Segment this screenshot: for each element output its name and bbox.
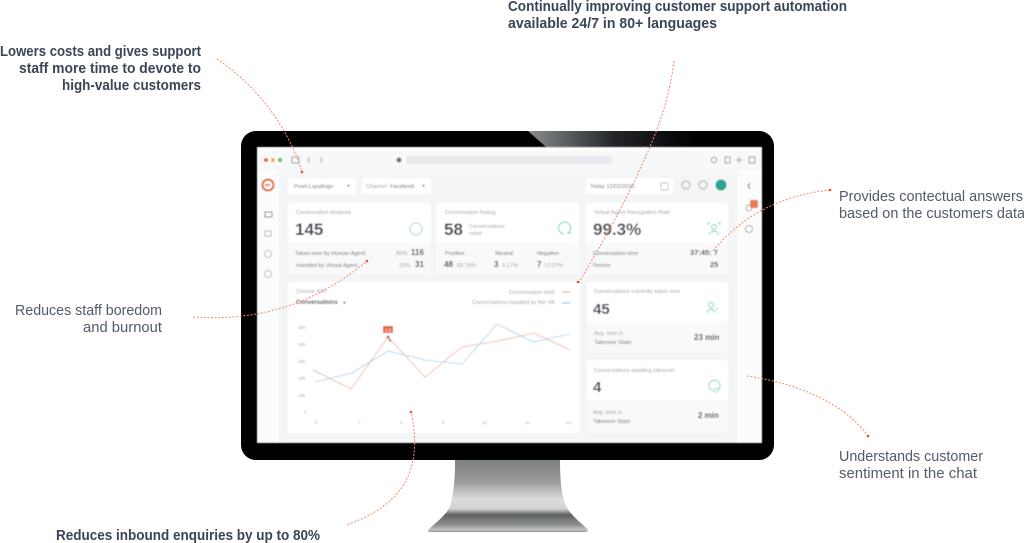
date picker: [586, 178, 673, 194]
chart axes: 40k: [298, 342, 306, 347]
card: line chart: [288, 282, 580, 433]
filter: Pearl-Lapalingo: Pearl-Lapalingo: [294, 184, 333, 190]
dashboard screen: [257, 147, 762, 443]
callout: staff boredom: [15, 303, 162, 336]
card: virtual agent recognition rate: Conversation time: [593, 251, 638, 257]
callout: contextual answers: [839, 189, 1024, 222]
chart axes: [298, 325, 572, 425]
card: conversation rating: Conversations: [469, 224, 505, 230]
card: conversation rating: Neutral: [495, 251, 513, 257]
right sidebar: [737, 170, 762, 443]
card: conversations awaiting takeover: Avg. time in: [593, 410, 622, 416]
card: conversation analysis: 31: [415, 260, 424, 269]
filter: channel: Facebook: [390, 184, 415, 190]
callout: lowers costs: high-value customers: [62, 78, 201, 94]
card: conversation rating: Negative: [537, 251, 559, 257]
card: virtual agent recognition rate: Retries: [593, 263, 611, 269]
callout: contextual answers: Provides contectual answers: [839, 189, 1023, 205]
callout: staff boredom: Reduces staff boredom: [15, 303, 162, 319]
card: conversation analysis: Conversation Analysis: [296, 210, 351, 216]
card: conversations currently taken over: 45: [593, 301, 610, 318]
card: virtual agent recognition rate: 37:45: 7: [690, 248, 718, 257]
callout: sentiment: [839, 449, 983, 482]
card: conversations awaiting takeover: 2 min: [698, 411, 719, 420]
chart axes: 8: [400, 420, 403, 425]
filter: channel: [362, 178, 431, 194]
callout: contextual answers: based on the customers data: [839, 206, 1024, 222]
card: conversations currently taken over: Takeover State: [594, 340, 631, 346]
chart axes: 0: [304, 410, 307, 415]
chart axes: 11: [525, 420, 530, 425]
callout: lowers costs: Lowers costs and gives support: [0, 44, 201, 60]
chart axes: 12: [566, 420, 572, 425]
card: conversation rating: 48: [444, 260, 453, 269]
callout: lowers costs: staff more time to devote to: [19, 61, 201, 77]
chart legend: Conversation held: [509, 290, 554, 296]
callout connector: inbound enquiries: [346, 411, 415, 525]
callout: sentiment: sentiment in the chat: [839, 466, 977, 482]
data point tooltip: 1.5: [385, 328, 392, 332]
card: conversations awaiting takeover: [587, 360, 728, 433]
card: conversation rating: Conversation Rating: [445, 210, 496, 216]
card: conversation analysis: 116: [411, 248, 424, 257]
card: conversation rating: rated: [469, 231, 482, 237]
chart axes: 30k: [298, 359, 306, 364]
chart axes: 10: [482, 420, 488, 425]
filter: channel: Channel: [366, 184, 387, 190]
callout: sentiment: Understands customer: [839, 449, 983, 465]
callout connector: sentiment: [747, 376, 869, 437]
card: conversation analysis: [288, 203, 431, 275]
card: conversation rating: Positive: [445, 251, 465, 257]
card: conversation rating: 7: [537, 260, 542, 269]
callout connector: lowers costs: [217, 59, 303, 173]
card: conversations currently taken over: Avg. time in: [594, 331, 623, 337]
chart axes: 9: [442, 420, 445, 425]
chart axes: 10k: [298, 393, 306, 398]
card: conversation analysis: 145: [295, 220, 323, 239]
callout: automation: available 24/7 in 80+ languages: [508, 16, 717, 32]
card: conversation analysis: Handled by Virtual Agent: [296, 263, 358, 269]
card: conversation rating: 82.76%: [457, 263, 476, 269]
card: conversation rating: 58: [444, 220, 463, 239]
callout: automation: [508, 0, 847, 32]
chart legend: Conversations handled by the VA: [472, 300, 555, 306]
data point tooltip: [383, 326, 393, 342]
callout: staff boredom: and burnout: [83, 320, 162, 336]
card: conversations awaiting takeover: 4: [593, 379, 602, 396]
chart axes: 20k: [298, 376, 306, 381]
card: conversation analysis: Taken over by Human Agent: [295, 251, 366, 257]
browser toolbar: [257, 147, 762, 170]
card: conversation analysis: 80%: [396, 251, 407, 257]
toolbar icons: [682, 180, 726, 190]
card: conversations awaiting takeover: Takeover State: [593, 419, 630, 425]
card: conversation rating: [436, 203, 579, 275]
card: line chart: Conversations: [296, 300, 338, 306]
left sidebar: [257, 170, 279, 443]
line: conversation held: [313, 333, 570, 389]
card: virtual agent recognition rate: [586, 203, 728, 275]
callout connector: contextual answers: [712, 189, 831, 252]
monitor bezel: [241, 131, 774, 460]
card: conversation rating: 3: [494, 260, 499, 269]
card: conversations currently taken over: [587, 282, 728, 353]
card: conversations awaiting takeover: Conversations awaiting takeover: [594, 368, 675, 374]
chart axes: 7: [358, 420, 361, 425]
date picker: Today 12/02/2020: [590, 184, 634, 190]
line: conversations handled: [315, 324, 570, 382]
callout connector: automation: [577, 61, 674, 284]
card: line chart: Choose KPI: [296, 289, 326, 295]
card: conversation analysis: 20%: [399, 263, 410, 269]
chart axes: 50k: [298, 325, 306, 330]
callout connector: staff boredom: [193, 260, 368, 318]
card: conversations currently taken over: Conversations currently taken over: [594, 289, 681, 295]
monitor stand: [428, 460, 588, 532]
card: conversation rating: 12.07%: [544, 263, 563, 269]
chart axes: 6: [315, 420, 318, 425]
card: conversations currently taken over: 23 min: [694, 333, 719, 342]
card: virtual agent recognition rate: 25: [710, 260, 718, 269]
card: virtual agent recognition rate: Virtual Agent Recognition Rate: [594, 210, 670, 216]
card: conversation rating: 5.17%: [502, 263, 518, 269]
callout: lowers costs: [0, 44, 201, 94]
card: virtual agent recognition rate: 99.3%: [593, 220, 641, 239]
filter: Pearl-Lapalingo: [288, 178, 356, 194]
chart legend: [472, 290, 570, 306]
